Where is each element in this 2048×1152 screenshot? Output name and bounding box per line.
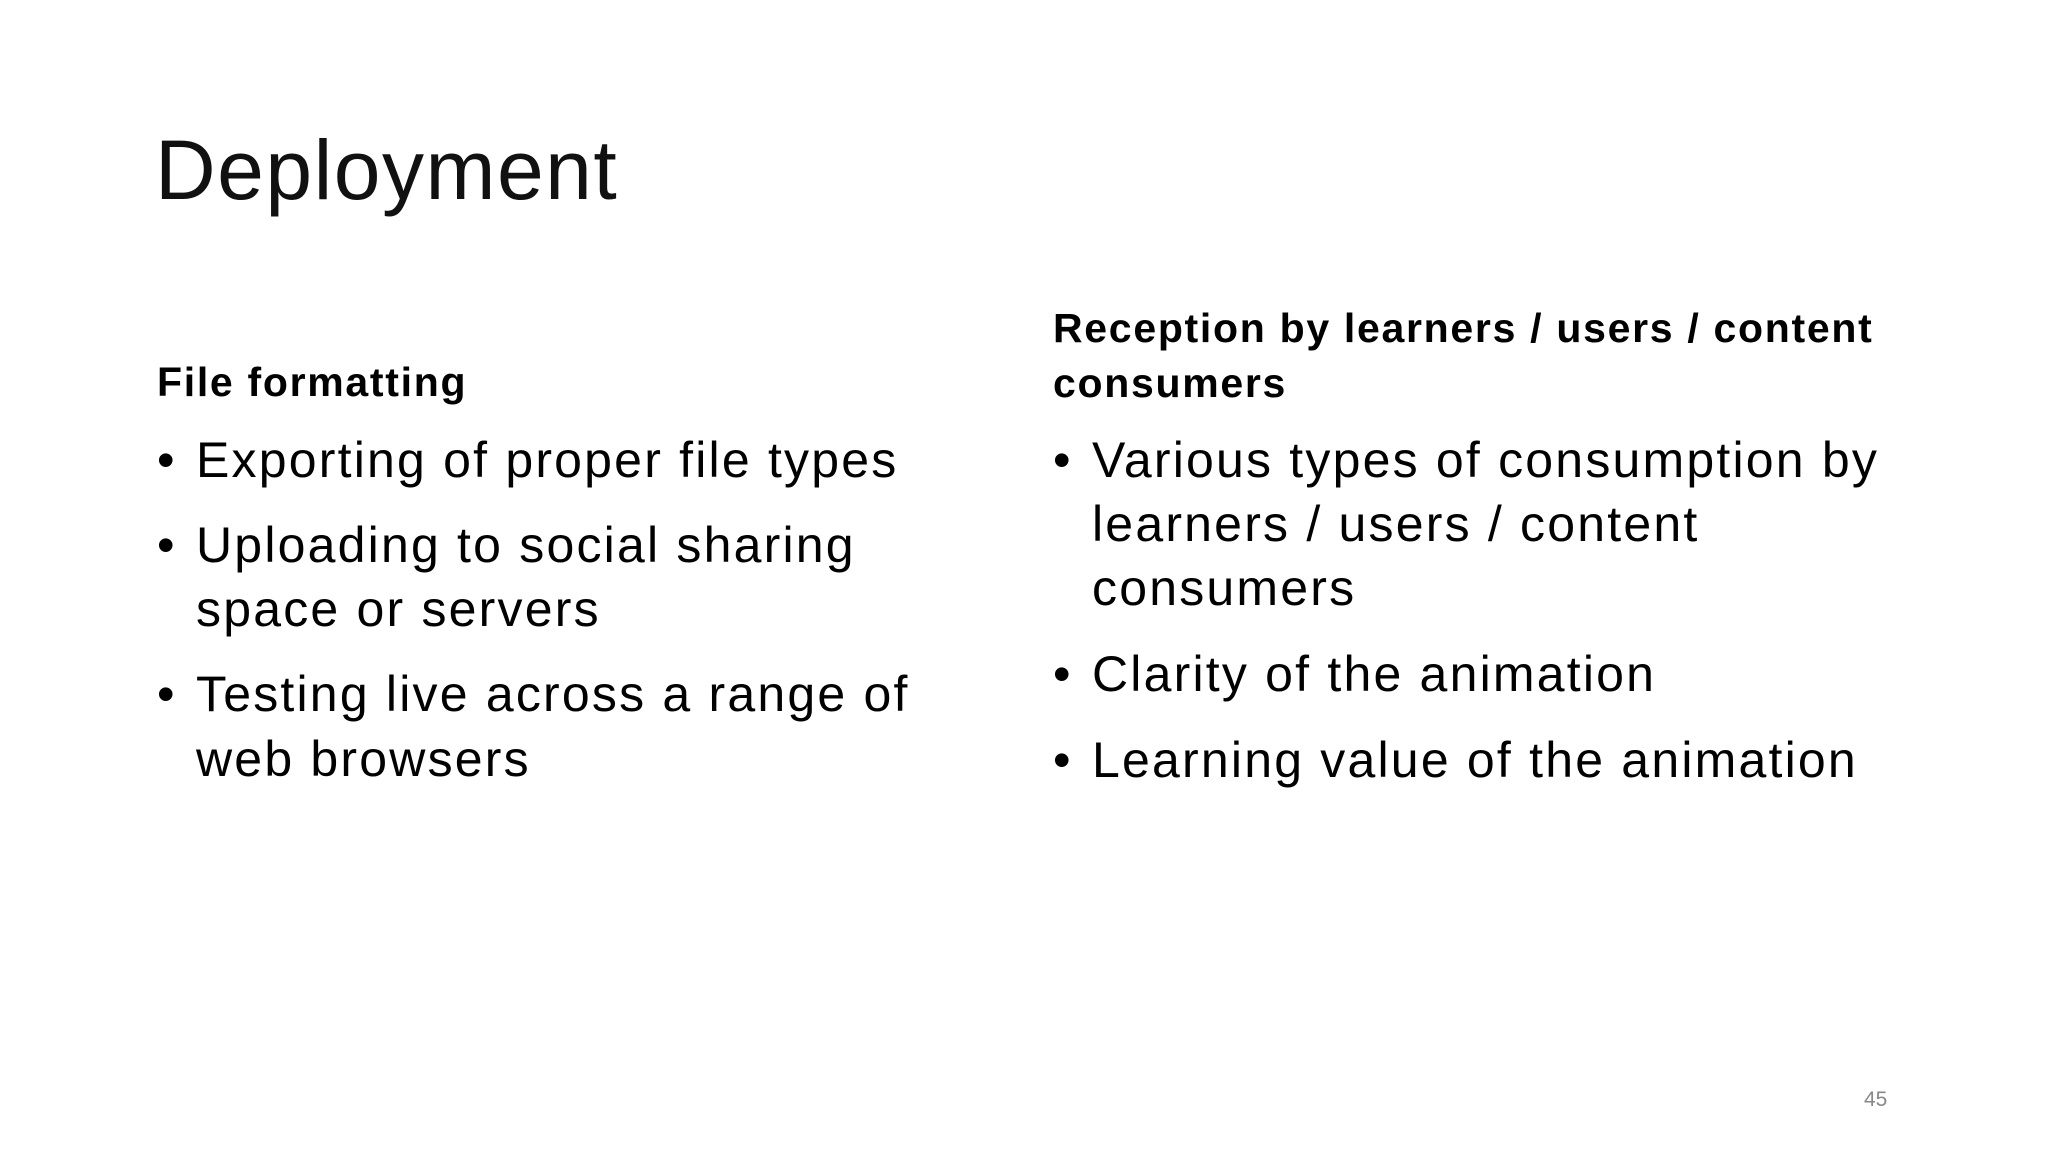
- bullet list left: •: [157, 666, 175, 722]
- bullet list right: Learning value of the animation: [1092, 732, 1858, 788]
- bullet list left: Testing live across a range of: [196, 666, 910, 722]
- bullet list left: web browsers: [196, 731, 531, 787]
- heading: reception: [1053, 305, 1873, 406]
- bullet list left: Uploading to social sharing: [196, 517, 856, 573]
- title: Deployment: [155, 123, 618, 217]
- bullet list right: Clarity of the animation: [1092, 646, 1656, 702]
- panel: reception: [1053, 305, 1879, 788]
- bullet list left: •: [157, 517, 175, 573]
- heading: reception: consumers: [1053, 360, 1287, 406]
- page number: 45: [1864, 1088, 1887, 1111]
- bullet list right: learners / users / content: [1092, 496, 1699, 552]
- bullet list right: [1053, 432, 1879, 788]
- bullet list right: •: [1053, 732, 1071, 788]
- bullet list left: space or servers: [196, 581, 601, 637]
- panel: file formatting: [157, 359, 910, 787]
- bullet list right: consumers: [1092, 560, 1356, 616]
- bullet list left: [157, 432, 910, 787]
- bullet list right: •: [1053, 432, 1071, 488]
- bullet list left: •: [157, 432, 175, 488]
- bullet list right: •: [1053, 646, 1071, 702]
- heading: reception: Reception by learners / users / content: [1053, 305, 1873, 351]
- bullet list right: Various types of consumption by: [1092, 432, 1879, 488]
- heading: file formatting: File formatting: [157, 359, 467, 405]
- bullet list left: Exporting of proper file types: [196, 432, 898, 488]
